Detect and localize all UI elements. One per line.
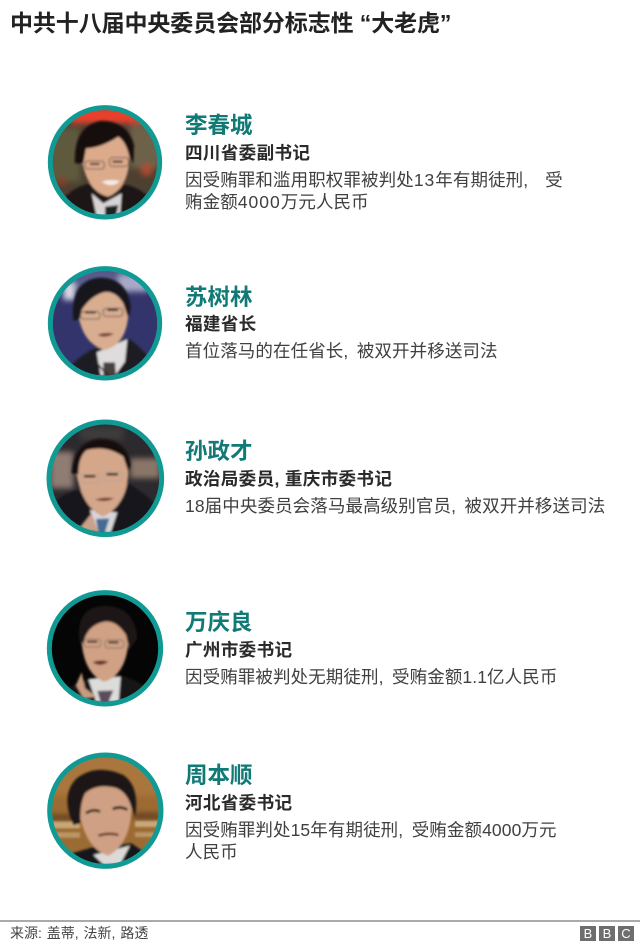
icon: portrait 孙政才: [46, 420, 164, 538]
icon: BBC logo: [580, 926, 634, 941]
panel: 李春城: [48, 105, 563, 220]
name: 苏树林: [185, 285, 253, 310]
name: 孙政才: [185, 439, 253, 464]
panel: 孙政才: [46, 420, 605, 538]
icon: portrait 苏树林: [48, 266, 162, 380]
description: 贿金额4000万元人民币: [185, 192, 369, 212]
icon: portrait 李春城: [48, 105, 162, 220]
description: 18届中央委员会落马最高级别官员, 被双开并移送司法: [185, 496, 605, 516]
description: 因受贿罪判处15年有期徒刑, 受贿金额4000万元: [185, 820, 557, 840]
description: 因受贿罪和滥用职权罪被判处13年有期徒刑, 受: [185, 170, 563, 190]
role: 福建省长: [185, 314, 257, 334]
description: 首位落马的在任省长, 被双开并移送司法: [185, 341, 498, 361]
role: 政治局委员, 重庆市委书记: [185, 469, 392, 489]
panel: 万庆良: [46, 590, 557, 706]
description: [185, 820, 557, 862]
icon: portrait 万庆良: [46, 590, 164, 706]
title: 中共十八届中央委员会部分标志性 “大老虎”: [10, 10, 451, 36]
icon: BBC logo: B: [603, 926, 611, 941]
role: 四川省委副书记: [185, 143, 310, 163]
source note: 来源: 盖蒂, 法新, 路透: [10, 925, 148, 941]
name: 李春城: [185, 113, 253, 138]
icon: BBC logo: C: [621, 926, 631, 941]
description: [185, 170, 563, 212]
icon: BBC logo: B: [584, 926, 592, 941]
role: 广州市委书记: [185, 640, 292, 660]
description: 人民币: [185, 842, 238, 862]
panel: 苏树林: [48, 266, 498, 380]
description: 因受贿罪被判处无期徒刑, 受贿金额1.1亿人民币: [185, 667, 557, 687]
name: 万庆良: [185, 610, 253, 635]
name: 周本顺: [185, 763, 253, 788]
role: 河北省委书记: [185, 793, 292, 813]
panel: 周本顺: [47, 752, 556, 869]
icon: portrait 周本顺: [47, 752, 164, 869]
